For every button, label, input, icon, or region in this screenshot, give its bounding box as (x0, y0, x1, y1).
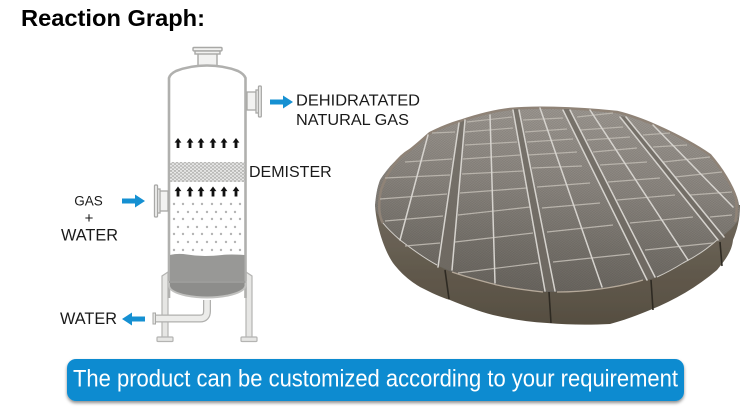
title: Reaction Graph: (21, 5, 205, 31)
banner background (67, 359, 684, 401)
right outlet nozzle (247, 86, 261, 117)
water droplets (173, 203, 241, 251)
joint bands (438, 109, 724, 291)
side wall seams (445, 242, 722, 323)
vessel legs (157, 272, 257, 342)
label: water out: WATER (60, 310, 117, 328)
top flange and neck (193, 48, 222, 66)
arrow: inlet (122, 194, 145, 208)
upper arrows (175, 138, 239, 148)
bottom head (169, 282, 246, 298)
label: dehydrated: DEHIDRATATED (296, 92, 420, 110)
disc side wall (375, 205, 740, 325)
vessel shell (169, 66, 246, 298)
label: water in: WATER (61, 226, 118, 244)
left inlet nozzle (154, 185, 168, 217)
cross bars (380, 113, 732, 273)
label: demister: DEMISTER (249, 164, 332, 181)
rim (379, 108, 737, 223)
arrow: outlet (270, 96, 293, 108)
label: natural gas: NATURAL GAS (296, 112, 409, 129)
diagram: separator vessel (153, 48, 261, 342)
drain pipe (154, 300, 207, 318)
liquid sump (170, 254, 244, 282)
label: gas: GAS (74, 194, 103, 208)
drain flange (153, 313, 156, 324)
disc top surface (375, 108, 740, 292)
white support bars (400, 108, 733, 291)
label: plus: + (85, 210, 94, 227)
banner text: The product can be customized according to your requirement (73, 366, 678, 392)
arrow: water outlet (122, 312, 145, 326)
demister pad (170, 162, 244, 182)
lower arrows (175, 186, 239, 196)
banner (67, 359, 684, 401)
product photo: demister pad disc (375, 108, 740, 325)
